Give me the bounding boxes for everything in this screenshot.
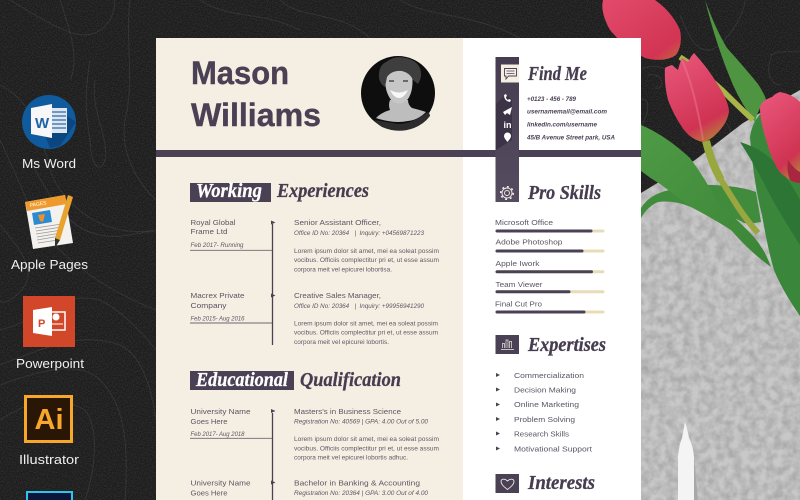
contact icons: in [504, 120, 512, 130]
concrete surface [641, 90, 800, 500]
entry: Macrex Private [190, 291, 438, 346]
name: Mason [191, 55, 289, 91]
wedge leaf [740, 142, 800, 245]
entry: Bachelor: Bachelor in Banking & Accounting [294, 478, 420, 488]
icon: chart [496, 335, 519, 354]
section: interests [496, 472, 595, 494]
entry: Macrex Private: Office ID No: 20364 | Inquiry: +99956941290 [294, 303, 425, 310]
name [191, 55, 321, 133]
entry: Masters [190, 407, 439, 462]
smile [390, 90, 408, 98]
icon: Ms Word [22, 95, 76, 149]
eyes [389, 80, 408, 82]
entry: Royal Global [190, 218, 439, 274]
skill bars [495, 218, 604, 314]
heading: Pro Skills [527, 182, 601, 204]
expertise list: Decision Making [514, 386, 576, 394]
small curved leaf [641, 185, 761, 223]
heading: Working [196, 180, 262, 202]
shirt [374, 112, 430, 131]
icon: Illustrator: Ai [34, 404, 64, 436]
entry: Macrex Private: Macrex Private [190, 291, 244, 300]
entry: Masters: Feb 2017- Aug 2018 [190, 431, 245, 438]
face [385, 70, 412, 104]
expertise list: Problem Solving [514, 415, 575, 424]
icon: stylus pen [678, 422, 698, 500]
portrait photo [361, 56, 435, 131]
entry: Macrex Private: Creative Sales Manager, [294, 291, 381, 300]
chest and neck [376, 100, 426, 122]
icon: Illustrator [26, 396, 72, 442]
entry: Bachelor [190, 478, 429, 498]
tulip one [602, 0, 681, 60]
expertise list: Commercialization [514, 371, 584, 380]
name: Williams [191, 97, 321, 133]
icon: Photoshop [27, 492, 72, 500]
contact details: 45/B Avenue Street park, USA [526, 134, 616, 142]
icon: Ms Word: W [35, 115, 50, 132]
label: Apple Pages: Apple Pages [11, 257, 89, 272]
entry: Masters: corpora meit vel epicurei lobortis adhuc. [294, 454, 408, 462]
skill bars: Apple Iwork [496, 259, 540, 268]
skill bars: Adobe Photoshop [496, 238, 562, 246]
heading: Interests [527, 472, 595, 494]
entry: Bachelor: University Name [190, 478, 250, 488]
label: Illustrator: Illustrator [19, 452, 80, 467]
icon: Powerpoint [23, 296, 75, 347]
expertise list: Research Skills [514, 430, 569, 438]
upper stem [680, 57, 753, 120]
header bar [156, 150, 641, 157]
contact details: usernamemail@email.com [527, 108, 608, 116]
section: pro skills [495, 182, 604, 314]
heading: Experiences [276, 180, 369, 202]
heading: Educational [195, 369, 288, 391]
heading: Find Me [527, 63, 587, 85]
section: expertises [496, 334, 606, 454]
entry: Macrex Private: vocibus. Officiis complectitur pri et, ut esse assum [294, 330, 438, 336]
contact side bar [496, 57, 519, 202]
big leaf [641, 125, 771, 267]
entry: Macrex Private: Company [190, 301, 227, 310]
contact icons [496, 94, 512, 150]
section: educational qualification [190, 369, 439, 500]
entry: Masters: vocibus. Officiis complectitur pri et, ut esse assum [294, 446, 439, 452]
skill bars: Final Cut Pro [495, 300, 542, 308]
entry: Masters: University Name [190, 407, 250, 416]
entry: Macrex Private: corpora meit vel epicurei lobortis. [294, 339, 389, 346]
entry: Masters: Lorem ipsum dolor sit amet, mei ea soleat possim [294, 436, 439, 443]
contact details: linkedin.com/username [527, 122, 598, 128]
heading: Qualification [300, 369, 401, 391]
icon: heart [496, 474, 519, 493]
top leaf [705, 0, 766, 122]
icon: gear [501, 187, 513, 199]
contact details: +0123 - 456 - 789 [527, 96, 577, 103]
entry: Masters: Masters's in Business Science [294, 407, 401, 416]
resume page [156, 38, 641, 500]
entry: Bachelor: Goes Here [190, 488, 228, 498]
skill bars: Team Viewer [496, 280, 543, 289]
entry: Royal Global: Senior Assistant Officer, [294, 218, 381, 227]
label: Powerpoint: Powerpoint [16, 356, 84, 371]
timeline [190, 409, 276, 500]
right leaves [750, 112, 800, 316]
entry: Royal Global: Lorem ipsum dolor sit amet, mei ea soleat possim [294, 248, 439, 255]
label: Ms Word: Ms Word [22, 156, 76, 171]
skill bars: Microsoft Office [495, 218, 553, 227]
icon: speech bubble [501, 64, 519, 82]
tulip two [665, 53, 729, 142]
expertise list: Motivational Support [514, 444, 593, 454]
entry: Royal Global: Feb 2017- Running [190, 242, 244, 249]
tulip three [760, 92, 800, 183]
entry: Macrex Private: Feb 2015- Aug 2016 [190, 316, 245, 322]
tulips and leaves [602, 0, 800, 316]
entry: Royal Global: Royal Global [190, 218, 236, 227]
entry: Royal Global: Office ID No: 20364 | Inquiry: +04569871223 [294, 230, 425, 237]
entry: Bachelor: Registration No: 20364 | GPA: 3.00 Out of 4.00 [294, 490, 429, 497]
heading [190, 180, 369, 202]
expertise list: Online Marketing [514, 400, 579, 409]
entry: Masters: Registration No: 40569 | GPA: 4.00 Out of 5.00 [294, 418, 429, 426]
expertise list [496, 371, 593, 454]
section: working experiences [190, 180, 439, 346]
entry: Royal Global: Frame Ltd [190, 227, 228, 236]
contact details [526, 96, 616, 142]
icon: Apple Pages [25, 195, 73, 249]
icon: Powerpoint: P [38, 318, 45, 330]
entry: Masters: Goes Here [190, 417, 228, 426]
heading: Expertises [527, 334, 606, 356]
entry: Royal Global: corpora meit vel epicurei lobortisa. [294, 266, 392, 274]
icon: Apple Pages: PAGES [29, 200, 48, 209]
entry: Royal Global: vocibus. Officiis complectitur pri et, ut esse assum [294, 257, 439, 264]
heading [190, 369, 401, 391]
section: find me [496, 57, 616, 202]
hair [379, 57, 421, 87]
entry: Macrex Private: Lorem ipsum dolor sit amet, mei ea soleat possim [294, 320, 438, 328]
timeline [190, 220, 276, 345]
